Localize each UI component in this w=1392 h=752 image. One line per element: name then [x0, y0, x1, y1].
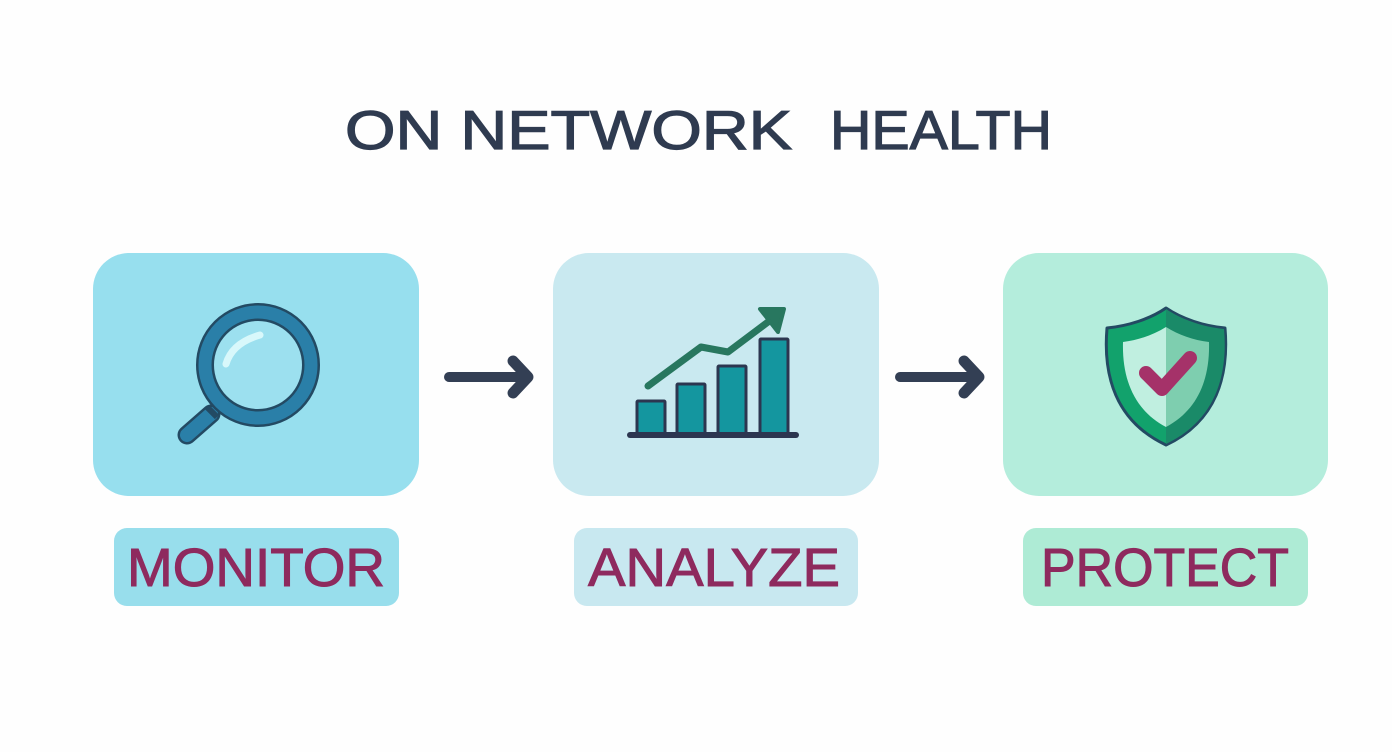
rising trend arrow — [648, 309, 784, 386]
check mark — [1146, 358, 1190, 389]
title — [345, 99, 1052, 161]
label: protect: PROTECT — [1041, 538, 1289, 598]
label: monitor: MONITOR — [127, 538, 385, 598]
arrow: monitor to analyze — [449, 361, 528, 393]
bar chart — [637, 339, 788, 435]
panel: monitor — [93, 253, 419, 496]
arrow: analyze to protect — [900, 361, 979, 393]
label: monitor — [114, 528, 399, 606]
icon: bar chart with rising arrow — [630, 309, 796, 435]
icon: magnifying glass — [187, 312, 311, 435]
panel: protect — [1003, 253, 1328, 496]
panel: analyze — [553, 253, 879, 496]
label: protect — [1023, 528, 1308, 606]
label: analyze: ANALYZE — [588, 538, 840, 598]
icon: shield with check — [1106, 308, 1226, 445]
title: HEALTH — [830, 99, 1052, 161]
title: ON NETWORK — [345, 99, 792, 161]
label: analyze — [574, 528, 858, 606]
